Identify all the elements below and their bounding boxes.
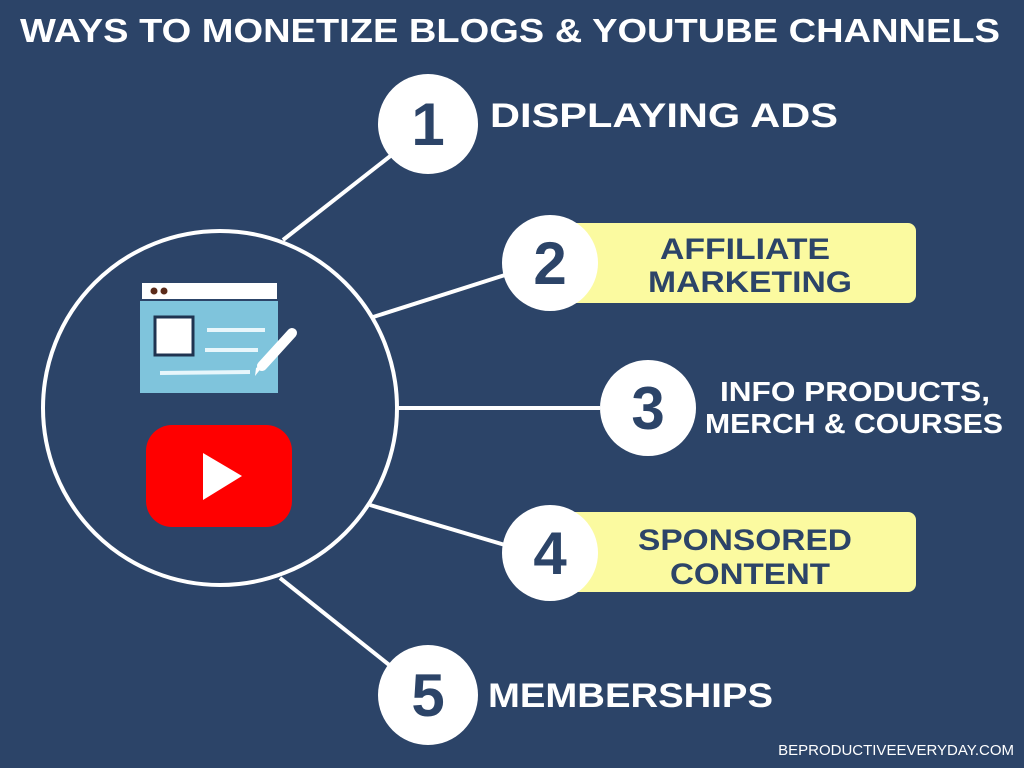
number circle 4 — [502, 505, 598, 601]
label 5: MEMBERSHIPS — [488, 677, 773, 715]
icon: youtube — [146, 425, 292, 527]
panel: 4 sponsored box: CONTENT — [670, 558, 830, 591]
footer url: BEPRODUCTIVEEVERYDAY.COM — [778, 742, 1014, 759]
label 3: MERCH & COURSES — [705, 408, 1003, 439]
number circle 2: 2 — [533, 230, 567, 297]
central circle — [43, 231, 397, 585]
number circle 4: 4 — [533, 520, 567, 587]
panel: 2 affiliate box: MARKETING — [648, 266, 852, 299]
panel: 4 sponsored box — [560, 512, 916, 592]
number circle 2 — [502, 215, 598, 311]
number circle 3 — [600, 360, 696, 456]
panel: 2 affiliate box — [560, 223, 916, 303]
label 3 — [705, 376, 1003, 439]
title: WAYS TO MONETIZE BLOGS & YOUTUBE CHANNELS — [20, 12, 1000, 49]
number circle 5: 5 — [411, 662, 445, 729]
number circle 3: 3 — [631, 375, 665, 442]
number circle 5 — [378, 645, 478, 745]
connector lines — [280, 150, 600, 668]
panel: 4 sponsored box: SPONSORED — [638, 524, 852, 557]
number circle 1 — [378, 74, 478, 174]
label 1: DISPLAYING ADS — [490, 97, 838, 135]
number circle 1: 1 — [411, 91, 445, 158]
icon: blog browser — [140, 283, 292, 393]
panel: 2 affiliate box: AFFILIATE — [660, 233, 830, 266]
label 3: INFO PRODUCTS, — [720, 376, 990, 407]
